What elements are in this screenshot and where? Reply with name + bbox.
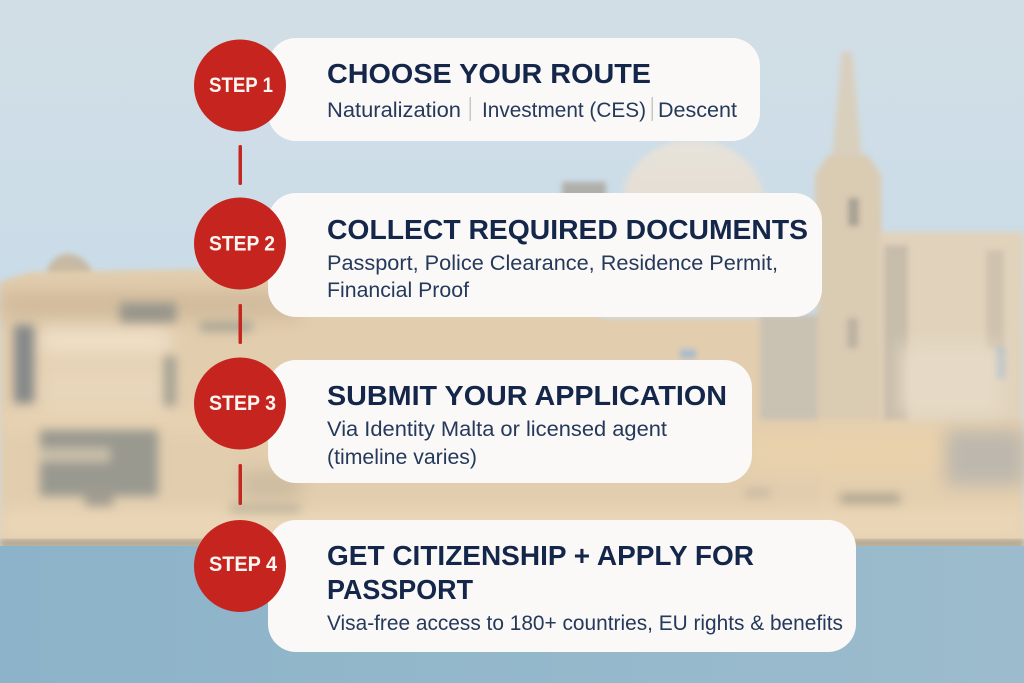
card: step 3 bbox=[268, 360, 752, 483]
heading: collect required documents: COLLECT REQUIRED DOCUMENTS bbox=[327, 214, 808, 245]
text: application channel: Via Identity Malta or licensed agent bbox=[327, 418, 667, 441]
text: routes bbox=[327, 97, 737, 122]
heading: get citizenship and apply for passport bbox=[327, 540, 754, 605]
card: step 4 bbox=[268, 520, 856, 652]
card: step 2 bbox=[268, 193, 822, 317]
text: application channel bbox=[327, 418, 667, 469]
text: documents list: Financial Proof bbox=[327, 279, 469, 302]
badge: step 1: STEP 1 bbox=[209, 74, 273, 97]
badge: step 2: STEP 2 bbox=[209, 232, 275, 256]
connector: step 2 to step 3 bbox=[238, 304, 242, 344]
badge: step 3 bbox=[194, 358, 286, 450]
badge: step 2 bbox=[194, 198, 286, 290]
card: step 1 bbox=[268, 38, 760, 141]
text: routes: Naturalization bbox=[327, 99, 461, 122]
badge: step 1 bbox=[194, 40, 286, 132]
text: documents list: Passport, Police Clearance, Residence Permit, bbox=[327, 252, 778, 275]
heading: get citizenship and apply for passport: GET CITIZENSHIP + APPLY FOR bbox=[327, 540, 754, 571]
badge: step 3: STEP 3 bbox=[209, 392, 276, 415]
text: documents list bbox=[327, 252, 778, 302]
badge: step 4 bbox=[194, 520, 286, 612]
badge: step 4: STEP 4 bbox=[209, 553, 277, 576]
connector: step 3 to step 4 bbox=[238, 464, 242, 505]
heading: submit your application: SUBMIT YOUR APPLICATION bbox=[327, 380, 727, 411]
text: passport benefits: Visa-free access to 180+ countries, EU rights & benefits bbox=[327, 612, 843, 635]
text: routes: Investment (CES) bbox=[482, 99, 646, 122]
heading: choose your route: CHOOSE YOUR ROUTE bbox=[327, 58, 651, 89]
text: routes: Descent bbox=[658, 99, 737, 122]
heading: get citizenship and apply for passport: PASSPORT bbox=[327, 574, 473, 605]
connector: step 1 to step 2 bbox=[238, 145, 242, 185]
text: application channel: (timeline varies) bbox=[327, 446, 477, 469]
